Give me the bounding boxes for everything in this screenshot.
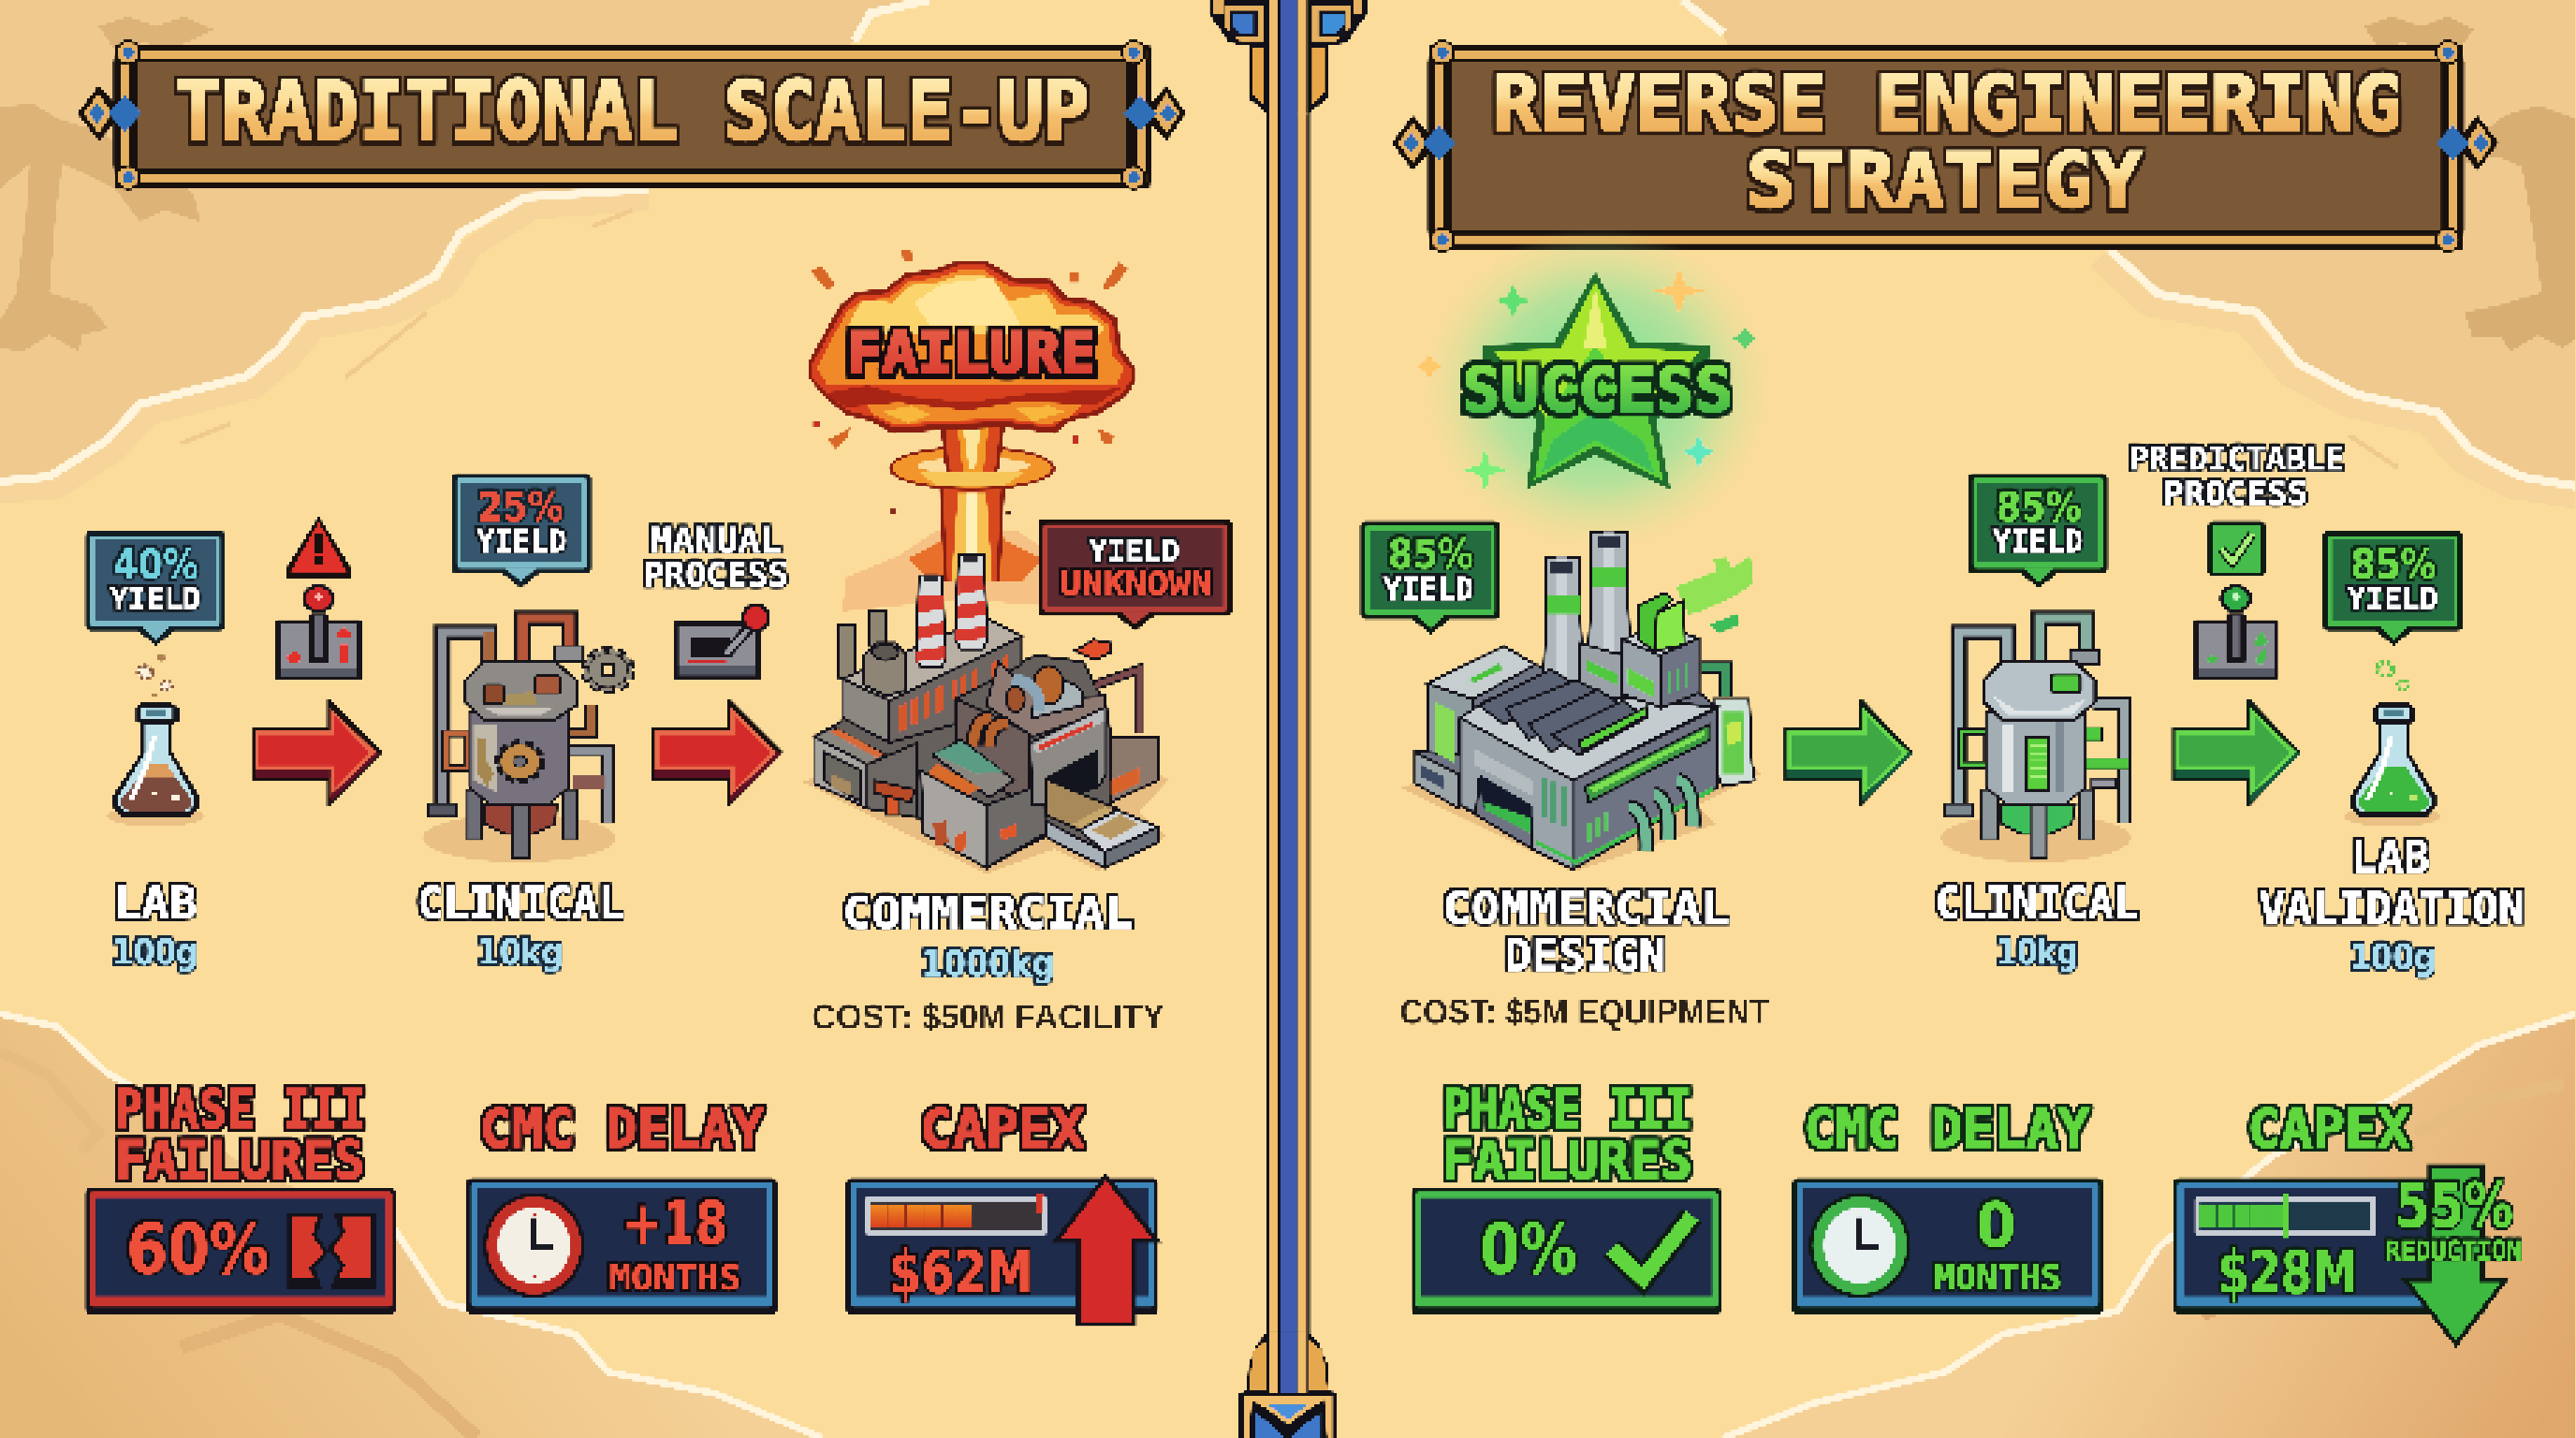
metric: cmc delay +18 months: CMC DELAY	[479, 1099, 764, 1160]
progress bar: green capex	[2195, 1193, 2376, 1238]
metric: phase iii failures 0%: 0%	[1480, 1211, 1577, 1290]
label: lab validation 100g	[2259, 832, 2525, 978]
heading banner: reverse engineering strategy: REVERSE ENGINEERING	[1492, 61, 2402, 149]
metric: cmc delay +18 months: MONTHS	[609, 1258, 741, 1299]
metric: capex $28m with 55% reduction	[2174, 1099, 2522, 1344]
callout: yield unknown: YIELD	[1090, 533, 1179, 569]
icon: red joystick	[275, 584, 361, 681]
arrow: cost up	[1057, 1177, 1157, 1325]
label: lab 100g: 100g	[112, 932, 198, 974]
arrow: cost down	[2405, 1167, 2506, 1344]
label: manual process: PROCESS	[644, 555, 788, 595]
arrow: lab to clinical	[252, 700, 383, 805]
icon: rusty clinical reactor	[422, 618, 632, 862]
metric: cmc delay +18 months: +18	[622, 1189, 728, 1258]
heading banner: reverse engineering strategy	[1392, 41, 2499, 252]
label: clinical 10kg: 10kg	[478, 932, 564, 974]
panel: reverse engineering strategy	[1360, 41, 2525, 1344]
callout: yield unknown	[1038, 520, 1232, 631]
text: facility cost: COST: $50M FACILITY	[812, 998, 1164, 1036]
label: predictable process	[2130, 440, 2345, 513]
label: lab 100g	[112, 878, 198, 974]
callout: 40% yield: YIELD	[110, 580, 200, 617]
label: commercial design	[1442, 883, 1730, 982]
callout: 40% yield: 40%	[113, 541, 198, 589]
ornament: bottom	[1238, 1332, 1338, 1438]
icon: green commercial factory	[1401, 532, 1762, 873]
background: right palm shadow	[2364, 17, 2576, 352]
heading banner: traditional scale-up: TRADITIONAL SCALE-UP	[176, 64, 1090, 159]
label: commercial design: DESIGN	[1505, 931, 1666, 982]
ornament: top	[1209, 0, 1367, 115]
metric: phase iii failures 60%: FAILURES	[115, 1130, 365, 1191]
metric: capex $62m	[846, 1099, 1158, 1325]
heading banner: traditional scale-up	[77, 41, 1186, 189]
icon: warning triangle	[285, 516, 352, 579]
panel: traditional scale-up	[77, 41, 1232, 1325]
metric: phase iii failures 60%: 60%	[126, 1211, 270, 1290]
metric: capex $28m with 55% reduction: CAPEX	[2247, 1099, 2410, 1160]
metric: phase iii failures 60%: PHASE III	[115, 1079, 366, 1140]
label: predictable process: PREDICTABLE	[2130, 440, 2345, 478]
label: manual process	[644, 521, 788, 595]
label: clinical 10kg: CLINICAL	[417, 878, 624, 930]
icon: check badge	[2208, 521, 2265, 577]
label: clinical 10kg: 10kg	[1996, 932, 2078, 974]
icon: clean clinical reactor	[1941, 618, 2130, 862]
callout: clinical 85% yield: 85%	[1996, 483, 2082, 531]
metric: cmc delay 0 months	[1793, 1099, 2103, 1314]
background: left palm shadow	[0, 17, 213, 352]
arrow: commercial to clinical	[1784, 700, 1914, 805]
callout: lab 85% yield: YIELD	[2348, 580, 2438, 617]
icon: manual switch	[674, 603, 770, 681]
metric: cmc delay 0 months: 0	[1976, 1189, 2016, 1262]
callout: clinical 85% yield: YIELD	[1993, 523, 2083, 560]
progress bar: red capex	[866, 1193, 1046, 1236]
metric: capex $62m: $62M	[889, 1238, 1033, 1307]
label: lab 100g: LAB	[113, 878, 198, 930]
center divider	[1209, 0, 1367, 1438]
label: clinical 10kg	[1936, 878, 2139, 974]
metric: capex $28m with 55% reduction: $28M	[2217, 1238, 2358, 1307]
callout: 25% yield: 25%	[478, 483, 564, 531]
icon: damaged commercial factory	[802, 554, 1168, 873]
metric: phase iii failures 0%: PHASE III	[1442, 1079, 1692, 1140]
text: equipment cost: COST: $5M EQUIPMENT	[1399, 992, 1770, 1031]
label: lab validation 100g: VALIDATION	[2259, 883, 2525, 934]
text: 55% reduction: REDUCTION	[2385, 1236, 2522, 1267]
heading banner: reverse engineering strategy: STRATEGY	[1747, 138, 2143, 226]
label: lab validation 100g: LAB	[2351, 832, 2430, 884]
icon: lab flask with brown sludge	[107, 654, 204, 827]
callout: commercial 85% yield: 85%	[1388, 531, 1473, 579]
icon: success star with glow: SUCCESS	[1462, 356, 1734, 426]
label: manual process: MANUAL	[651, 521, 782, 561]
callout: commercial 85% yield: YIELD	[1383, 571, 1473, 608]
label: clinical 10kg: CLINICAL	[1936, 878, 2139, 930]
metric: cmc delay 0 months: CMC DELAY	[1804, 1099, 2090, 1160]
icon: red clock	[483, 1193, 585, 1298]
icon: success star with glow	[1418, 227, 1771, 549]
callout: lab 85% yield	[2323, 531, 2463, 646]
metric: phase iii failures 0%	[1412, 1079, 1721, 1314]
callout: 25% yield	[452, 473, 592, 588]
icon: mushroom cloud explosion	[808, 250, 1135, 611]
icon: green joystick	[2193, 584, 2279, 681]
text: 55% reduction: 55%	[2395, 1169, 2513, 1242]
metric: phase iii failures 60%	[85, 1079, 396, 1314]
arrow: clinical to lab validation	[2172, 700, 2302, 805]
callout: clinical 85% yield	[1969, 473, 2108, 588]
metric: phase iii failures 0%: FAILURES	[1442, 1130, 1692, 1191]
callout: 25% yield: YIELD	[476, 523, 567, 560]
callout: yield unknown: UNKNOWN	[1060, 565, 1212, 603]
label: commercial 1000kg: COMMERCIAL	[842, 888, 1134, 940]
icon: mushroom cloud explosion: FAILURE	[846, 320, 1096, 385]
callout: 40% yield	[85, 531, 225, 646]
label: commercial 1000kg: 1000kg	[922, 943, 1055, 985]
metric: cmc delay 0 months: MONTHS	[1934, 1258, 2062, 1299]
icon: lab flask with green liquid	[2344, 662, 2441, 827]
text: 55% reduction	[2385, 1169, 2522, 1267]
label: clinical 10kg	[417, 878, 624, 974]
label: commercial 1000kg	[842, 888, 1134, 985]
arrow: clinical to commercial	[652, 700, 783, 805]
metric: cmc delay +18 months	[466, 1099, 777, 1314]
callout: lab 85% yield: 85%	[2351, 541, 2437, 589]
label: predictable process: PROCESS	[2163, 475, 2308, 513]
label: commercial design: COMMERCIAL	[1442, 883, 1730, 934]
label: lab validation 100g: 100g	[2349, 936, 2437, 978]
icon: green clock	[1808, 1193, 1910, 1298]
callout: commercial 85% yield	[1360, 521, 1500, 634]
metric: capex $62m: CAPEX	[920, 1099, 1085, 1160]
